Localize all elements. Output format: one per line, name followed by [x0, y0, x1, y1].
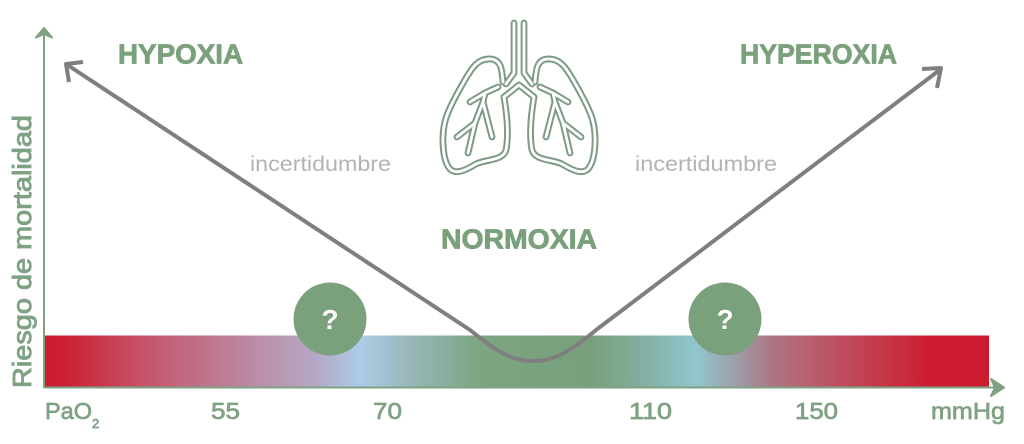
- x tick: 150: 150: [795, 398, 838, 424]
- arrow: V-shaped risk curve: [66, 62, 941, 361]
- question circle right: [688, 282, 762, 356]
- x axis label: PaO2: PaO: [45, 398, 92, 424]
- horizontal axis: [44, 379, 1004, 396]
- vertical axis: [36, 28, 52, 388]
- x axis unit: mmHg: mmHg: [931, 398, 1005, 424]
- label: uncertainty left: incertidumbre: [250, 153, 391, 176]
- gradient bar: [44, 336, 989, 388]
- x axis label: PaO2: [45, 398, 99, 431]
- heading: hyperoxia: HYPEROXIA: [740, 38, 897, 70]
- question circle right: ?: [716, 304, 734, 335]
- label: uncertainty right: incertidumbre: [635, 153, 777, 176]
- x tick: 110: 110: [629, 398, 672, 424]
- icon: lungs: [443, 23, 595, 172]
- heading: normoxia: NORMOXIA: [441, 224, 597, 254]
- x tick: 70: 70: [373, 398, 402, 424]
- heading: hypoxia: HYPOXIA: [118, 38, 243, 70]
- question circle left: [294, 282, 366, 356]
- y axis label: Riesgo de mortalidad: [7, 115, 37, 388]
- x tick: 55: 55: [211, 398, 240, 424]
- x axis label: PaO2: 2: [92, 416, 99, 431]
- question circle left: ?: [321, 304, 339, 335]
